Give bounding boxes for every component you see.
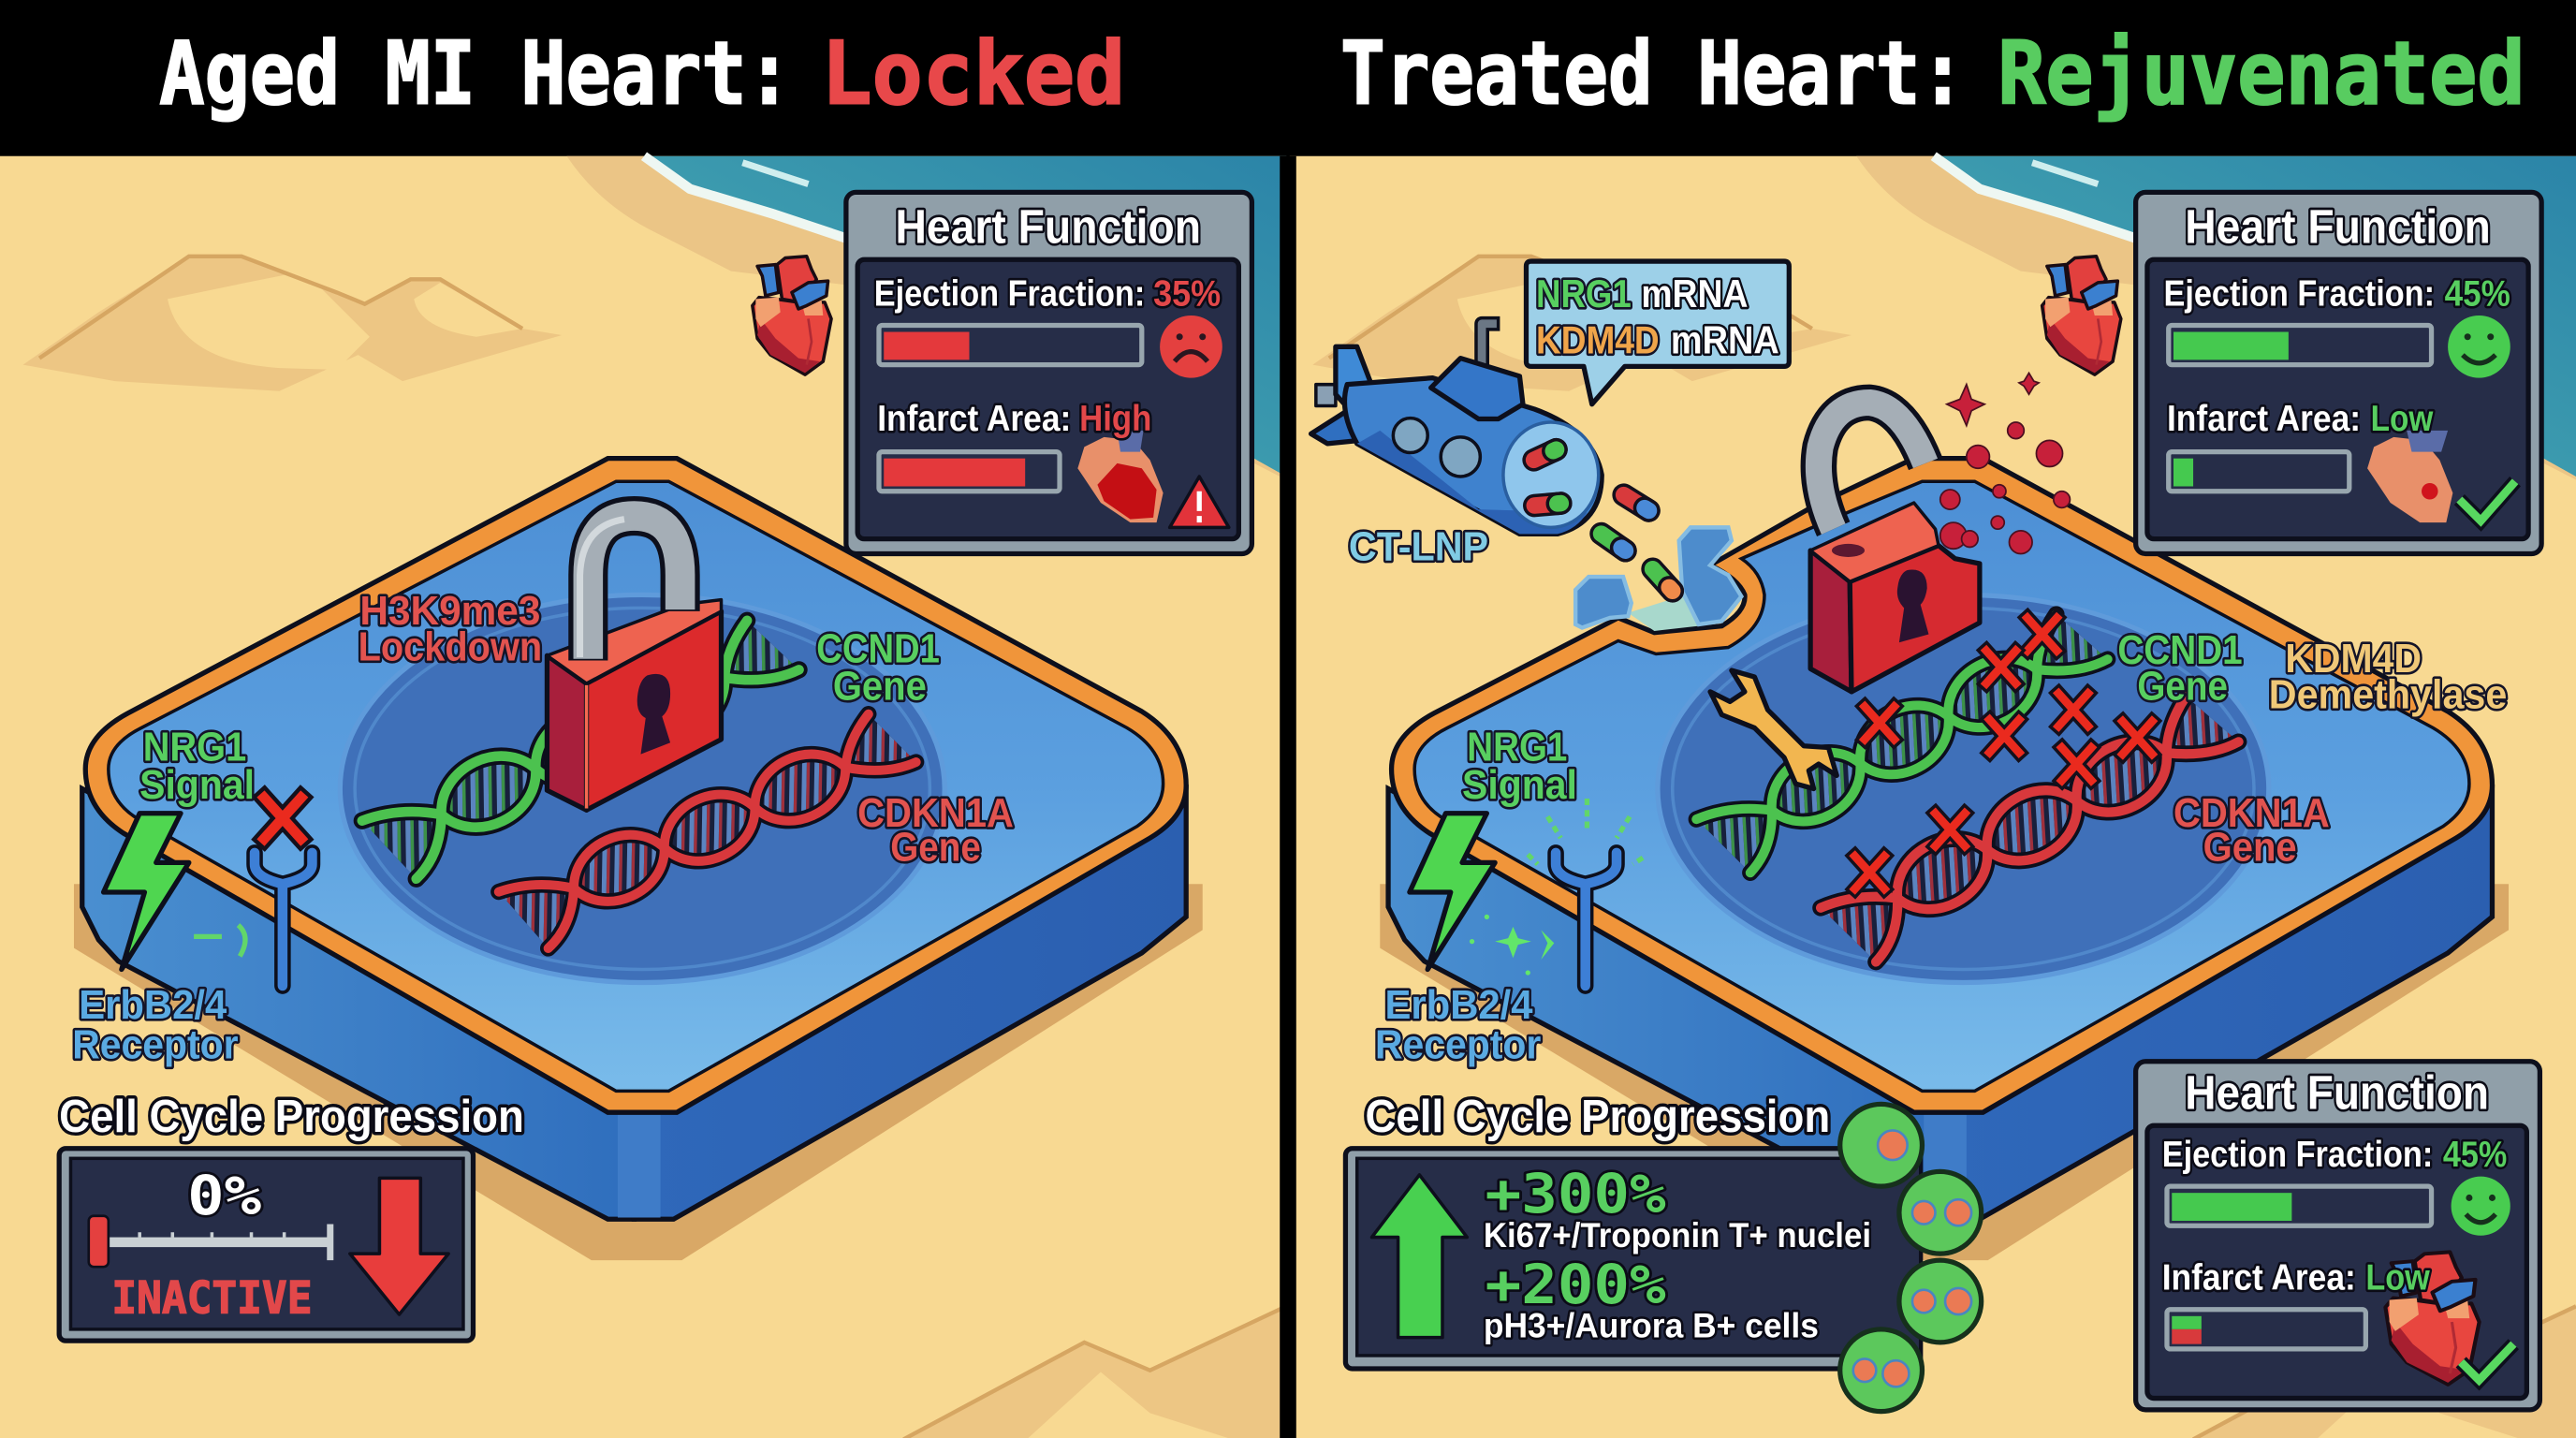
cells: dividing cardiomyocytes	[1840, 1104, 1982, 1412]
label: ErbB2/4 Receptor treated	[1375, 982, 1541, 1067]
label: ErbB2/4 Receptor	[72, 982, 238, 1067]
label: CCND1 Gene treated: Gene	[2137, 664, 2228, 710]
label: ErbB2/4 Receptor: Receptor	[72, 1021, 238, 1067]
panel inner	[2147, 1125, 2526, 1399]
infarct area bar	[879, 452, 1060, 492]
platform left wall	[82, 788, 634, 1219]
label: CCND1 Gene: Gene	[833, 664, 927, 710]
speech bubble: mRNA cargo: mRNA	[1671, 317, 1779, 361]
label: H3K9me3 Lockdown	[359, 588, 542, 670]
panel: heart function left	[846, 192, 1251, 553]
panel: aged heart cell platform	[74, 459, 1203, 1260]
gene: red CDKN1A helix	[474, 688, 960, 966]
title: right	[1340, 23, 2525, 125]
signal rays	[1528, 799, 1643, 864]
panel heading: Heart Function	[2185, 1066, 2489, 1120]
panel: heart function treated bottom	[2136, 1062, 2539, 1410]
icon: lightning NRG1 signal	[104, 814, 189, 969]
infarct area text: Infarct Area:	[2167, 399, 2361, 439]
status INACTIVE: INACTIVE	[111, 1272, 312, 1324]
signal glow	[1470, 915, 1554, 976]
ejection fraction bar	[879, 326, 1142, 365]
title: right: Treated Heart:	[1340, 23, 1965, 125]
icon: blocked X	[264, 798, 301, 839]
title: right: Rejuvenated	[1998, 23, 2525, 125]
label: KDM4D Demethylase: Demethylase	[2269, 671, 2507, 717]
panel: right beach background	[1290, 156, 2576, 1438]
free LNP capsules	[1588, 481, 1687, 605]
icon: submarine CT-LNP	[1311, 324, 1602, 534]
infarct area bar	[2167, 1310, 2365, 1349]
slider	[89, 1216, 333, 1267]
icon: sad face	[1160, 315, 1222, 378]
icon: ErbB2/4 receptor	[255, 853, 312, 986]
label: ErbB2/4 Receptor treated: ErbB2/4	[1385, 982, 1533, 1028]
membrane opening	[1575, 527, 1741, 631]
icon: check mark	[2459, 481, 2515, 521]
speech bubble: mRNA cargo: NRG1	[1536, 271, 1632, 315]
label: NRG1 Signal	[139, 725, 255, 808]
platform corner strip	[1924, 1104, 1967, 1218]
label: KDM4D Demethylase	[2269, 636, 2507, 717]
platform orange rim	[85, 459, 1186, 1112]
platform orange rim with opening	[1392, 459, 2492, 1112]
platform right wall	[634, 788, 1186, 1219]
label: NRG1 Signal treated	[1462, 725, 1577, 808]
label: CDKN1A Gene: Gene	[890, 825, 981, 871]
speech bubble: mRNA cargo: KDM4D	[1536, 317, 1660, 361]
title: left: Aged MI Heart:	[159, 23, 792, 125]
infarct area text: Low	[2365, 1258, 2431, 1299]
label: ErbB2/4 Receptor treated: Receptor	[1375, 1021, 1541, 1067]
icon: healthy heart	[2385, 1252, 2480, 1385]
platform corner strip	[618, 1104, 661, 1218]
panel divider	[1280, 156, 1296, 1438]
stat +300%: +300%	[1486, 1162, 1666, 1225]
label: CDKN1A Gene treated	[2174, 790, 2330, 871]
platform left wall	[1388, 788, 1940, 1219]
gene: red CDKN1A helix treated	[1794, 666, 2284, 984]
lock fragments	[1940, 373, 2070, 553]
label: NRG1 Signal treated: NRG1	[1467, 725, 1567, 770]
stat +200%: +200%	[1486, 1253, 1666, 1316]
icon: padlock broken	[1810, 403, 1980, 692]
icon: warning triangle	[1170, 477, 1229, 527]
platform right wall	[1940, 788, 2492, 1219]
ejection fraction text: 35%	[1153, 273, 1221, 314]
icon: smile face	[2448, 315, 2510, 378]
speech bubble: mRNA cargo: mRNA	[1641, 271, 1748, 315]
panel: cell cycle inactive	[59, 1149, 473, 1341]
infarct area text: Low	[2371, 399, 2434, 439]
label: CDKN1A Gene	[857, 790, 1014, 871]
label: NRG1 Signal: NRG1	[143, 725, 246, 770]
icon: check mark bottom	[2461, 1344, 2513, 1380]
stat description pH3: pH3+/Aurora B+ cells	[1484, 1307, 1819, 1345]
icon: smile face	[2452, 1177, 2510, 1236]
label: H3K9me3 Lockdown: H3K9me3	[359, 588, 540, 634]
stat description Ki67: Ki67+/Troponin T+ nuclei	[1484, 1216, 1871, 1255]
panel: left beach background	[0, 156, 1286, 1438]
icon: weak signal arrow	[194, 925, 245, 956]
ejection fraction text: Ejection Fraction:	[2163, 273, 2435, 314]
icon: up arrow	[1372, 1175, 1467, 1338]
label: CCND1 Gene: CCND1	[816, 625, 940, 671]
speech bubble: mRNA cargo	[1526, 261, 1789, 404]
platform top surface	[109, 481, 1164, 1091]
title: left: Locked	[822, 23, 1125, 125]
gene: green CCND1 helix treated	[1671, 584, 2152, 894]
label: KDM4D Demethylase: KDM4D	[2285, 636, 2422, 682]
icon: wrench	[1710, 670, 1837, 788]
icon: receptor treated	[1556, 853, 1617, 986]
label: CT-LNP: CT-LNP	[1349, 523, 1488, 569]
platform top surface	[1414, 481, 2469, 1091]
panel: treated heart cell platform	[1380, 459, 2509, 1260]
panel inner	[857, 259, 1238, 539]
label: CDKN1A Gene treated: Gene	[2203, 825, 2297, 871]
icon: healing heart	[2367, 431, 2452, 522]
ejection fraction text: Ejection Fraction:	[874, 273, 1145, 314]
nucleus	[340, 594, 944, 983]
label: CDKN1A Gene: CDKN1A	[857, 790, 1014, 836]
ejection fraction bar	[2167, 1186, 2432, 1225]
DNA damage markers	[1855, 618, 2152, 888]
panel: cell cycle active	[1345, 1149, 1921, 1369]
nucleus	[1658, 594, 2269, 983]
ejection fraction bar	[2169, 326, 2432, 365]
header bar	[0, 0, 2576, 156]
label: ErbB2/4 Receptor: ErbB2/4	[79, 982, 227, 1028]
infarct area text: High	[1079, 399, 1151, 439]
heading: cell cycle progression right: Cell Cycle Progression	[1365, 1092, 1830, 1142]
ejection fraction text: Ejection Fraction:	[2162, 1135, 2433, 1175]
infarct area text: Infarct Area:	[877, 399, 1071, 439]
icon: lightning NRG1 signal treated	[1410, 814, 1495, 969]
label: CCND1 Gene	[816, 625, 940, 710]
infarct area text: Infarct Area:	[2162, 1258, 2356, 1299]
icon: padlock closed	[547, 516, 721, 810]
icon: down arrow	[350, 1178, 448, 1314]
label: NRG1 Signal treated: Signal	[1462, 762, 1577, 808]
panel inner	[2147, 259, 2528, 539]
ejection fraction text: 45%	[2443, 1135, 2507, 1175]
gene: green CCND1 helix	[335, 592, 846, 900]
label: H3K9me3 Lockdown: Lockdown	[359, 624, 542, 670]
label: NRG1 Signal: Signal	[139, 762, 255, 808]
icon: heart decoration right	[2042, 257, 2121, 374]
panel heading: Heart Function	[896, 200, 1201, 254]
value 0%: 0%	[187, 1164, 261, 1227]
icon: heart decoration left	[753, 257, 831, 374]
heading: cell cycle progression left: Cell Cycle Progression	[59, 1092, 524, 1142]
ejection fraction text: 45%	[2445, 273, 2510, 314]
infarct area bar	[2169, 452, 2349, 492]
panel: heart function treated top	[2136, 192, 2541, 553]
label: CCND1 Gene treated: CCND1	[2117, 627, 2243, 673]
icon: infarcted heart	[1077, 431, 1164, 522]
label: CCND1 Gene treated	[2117, 627, 2243, 710]
label: CDKN1A Gene treated: CDKN1A	[2174, 790, 2330, 836]
panel heading: Heart Function	[2185, 200, 2491, 254]
